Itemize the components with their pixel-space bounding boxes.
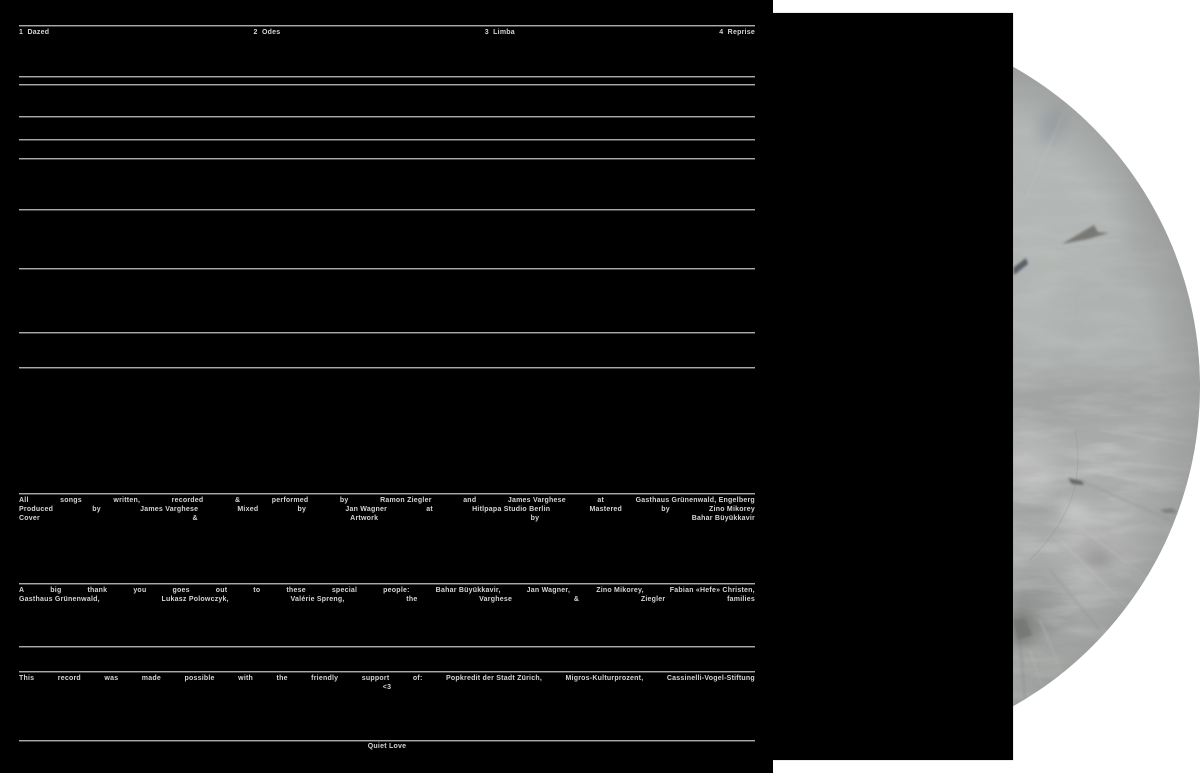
credits: by <box>661 506 670 513</box>
credits: by <box>531 515 539 522</box>
support: with <box>238 675 253 682</box>
support: support <box>362 675 389 682</box>
thanks: families <box>727 596 755 603</box>
thanks: thank <box>87 587 107 594</box>
thanks: Ziegler <box>641 596 665 603</box>
album title: Quiet Love <box>368 743 406 750</box>
thanks: special <box>332 587 357 594</box>
support <box>19 674 755 691</box>
thanks: people: <box>383 587 410 594</box>
support: <3 <box>383 684 391 691</box>
thanks: A <box>19 587 24 594</box>
thanks: Varghese <box>479 596 512 603</box>
thanks: Jan Wagner, <box>527 587 570 594</box>
thanks: to <box>253 587 260 594</box>
thanks: Zino Mikorey, <box>596 587 644 594</box>
credits: performed <box>272 497 308 504</box>
credits: Mixed <box>237 506 258 513</box>
track list: 1 Dazed <box>19 29 49 36</box>
support: the <box>277 675 288 682</box>
thanks: you <box>133 587 146 594</box>
credits: written, <box>113 497 140 504</box>
thanks: the <box>406 596 417 603</box>
credits: at <box>597 497 604 504</box>
track list: 4 Reprise <box>719 29 755 36</box>
credits: James Varghese <box>140 506 198 513</box>
track rule <box>19 25 755 26</box>
credits: Cover <box>19 515 40 522</box>
credits: and <box>463 497 476 504</box>
inner sleeve <box>760 13 1013 760</box>
credits: Ramon Ziegler <box>380 497 432 504</box>
credits: Jan Wagner <box>345 506 387 513</box>
support: of: <box>413 675 423 682</box>
support: possible <box>184 675 215 682</box>
support: friendly <box>311 675 338 682</box>
support: This <box>19 675 34 682</box>
credits: by <box>92 506 101 513</box>
thanks: Bahar Büyükkavir, <box>436 587 501 594</box>
credits: recorded <box>172 497 203 504</box>
thanks: out <box>216 587 227 594</box>
track list: 3 Limba <box>485 29 515 36</box>
thanks: Lukasz Polowczyk, <box>162 596 229 603</box>
credits: & <box>192 515 198 522</box>
credits <box>19 496 755 522</box>
track list <box>19 28 755 36</box>
support: Migros-Kulturprozent, <box>565 675 643 682</box>
thanks: big <box>50 587 61 594</box>
thanks: Valérie Spreng, <box>291 596 345 603</box>
credits: by <box>340 497 349 504</box>
track list: 2 Odes <box>254 29 280 36</box>
thanks: Gasthaus Grünenwald, <box>19 596 100 603</box>
credits: Zino Mikorey <box>709 506 755 513</box>
thanks: goes <box>172 587 190 594</box>
credits: songs <box>60 497 82 504</box>
support: was <box>104 675 118 682</box>
credits: at <box>426 506 433 513</box>
support: Cassinelli-Vogel-Stiftung <box>667 675 755 682</box>
credits: & <box>235 497 240 504</box>
credits: Mastered <box>589 506 622 513</box>
thanks <box>19 586 755 603</box>
credits: Gasthaus Grünenwald, Engelberg <box>636 497 755 504</box>
vinyl record <box>1013 66 1200 706</box>
credits: Produced <box>19 506 53 513</box>
credits: Artwork <box>350 515 378 522</box>
support: made <box>142 675 161 682</box>
credits: All <box>19 497 29 504</box>
thanks: Fabian «Hefe» Christen, <box>670 587 755 594</box>
thanks: these <box>286 587 306 594</box>
support: Popkredit der Stadt Zürich, <box>446 675 542 682</box>
credits: by <box>298 506 306 513</box>
support: record <box>58 675 81 682</box>
back cover panel <box>0 0 773 773</box>
thanks: & <box>574 596 579 603</box>
credits: Hitlpapa Studio Berlin <box>472 506 550 513</box>
credits: James Varghese <box>508 497 566 504</box>
credits: Bahar Büyükkavir <box>692 515 755 522</box>
